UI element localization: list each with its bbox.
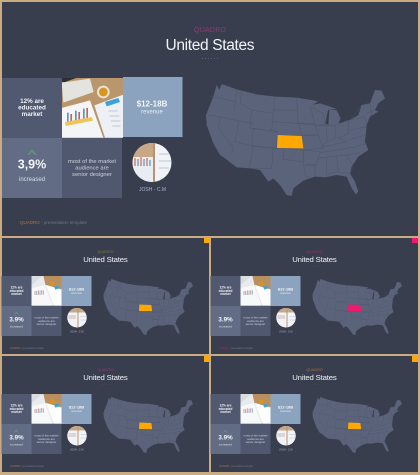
slide: bottom left: QUADRO - presentation template — [10, 465, 45, 468]
corner tabs — [204, 238, 418, 362]
panel: senior designer text: senior designer — [72, 172, 112, 178]
US map — [206, 84, 385, 196]
slide: bottom right — [210, 368, 402, 468]
slide: top right: increased — [219, 324, 232, 328]
panel: revenue — [123, 77, 182, 137]
slide: top right — [210, 250, 402, 350]
slide: bottom left: JOSH - C.M — [70, 448, 84, 452]
slide: top right: most of the market — [244, 316, 268, 320]
slide: bottom left: senior designer — [37, 440, 56, 444]
slide: bottom right: audience are — [247, 437, 264, 441]
slide: top right: QUADRO — [306, 250, 323, 254]
slide: top left — [2, 250, 193, 350]
panel: educated market: market — [22, 111, 43, 118]
slide: bottom right: most of the market — [244, 434, 268, 438]
slide: top left: senior designer — [37, 322, 56, 326]
slide: bottom right: QUADRO - presentation template — [220, 465, 254, 468]
panel: senior designer text: audience are — [75, 166, 109, 172]
slide: top right: 12% are — [220, 286, 232, 290]
title: United States — [166, 37, 255, 54]
slide: bottom left: United States — [83, 373, 128, 382]
slide: top left: revenue — [71, 291, 82, 295]
slide: bottom left: audience are — [38, 437, 55, 441]
slide: bottom right: $12-18B — [278, 404, 293, 409]
slide: top right: market — [220, 292, 231, 296]
slide: top right: 3.9% — [218, 316, 233, 323]
slide: top right: United States — [292, 255, 337, 264]
slide: bottom right: ...... — [310, 382, 319, 386]
panel: educated market: educated — [18, 104, 46, 112]
slide: bottom right: QUADRO — [306, 368, 323, 372]
slide: top right: audience are — [247, 319, 264, 323]
slide: top left: educated — [10, 289, 23, 293]
slide: bottom left: market — [11, 410, 22, 414]
slide: top right: ...... — [310, 264, 319, 268]
slide: bottom right: United States — [292, 373, 337, 382]
slide: top left: 12% are — [11, 286, 23, 290]
slide: top right: educated — [219, 289, 232, 293]
slide: bottom left: educated — [10, 407, 23, 411]
slide: top right: QUADRO - presentation template — [220, 347, 254, 350]
slide: top left: audience are — [38, 319, 55, 323]
slide: bottom left: QUADRO — [98, 368, 114, 372]
slide: bottom left: increased — [10, 442, 23, 446]
eyebrow: QUADRO: QUADRO — [194, 27, 227, 34]
main slide — [2, 27, 385, 225]
slide: bottom left: 12% are — [11, 404, 23, 408]
highlighted state: Kansas — [277, 135, 303, 148]
photo: desk with charts — [60, 75, 125, 139]
slide: bottom right: JOSH - C.M — [279, 448, 292, 452]
slide: top right: JOSH - C.M — [279, 330, 292, 334]
slide: bottom right: market — [220, 410, 231, 414]
portrait circle — [130, 141, 174, 185]
slide: top right: senior designer — [246, 322, 265, 326]
slide: bottom right: senior designer — [246, 440, 265, 444]
panel: revenue: revenue — [141, 110, 164, 116]
footer text: QUADRO - presentation template — [20, 220, 88, 225]
slide: top left: QUADRO — [98, 250, 114, 254]
slide: top left: ...... — [101, 264, 110, 268]
slide: top right: revenue — [280, 291, 291, 295]
panel: increased stat: increased — [19, 177, 45, 183]
caption: JOSH - C.M: JOSH - C.M — [139, 187, 166, 193]
slide: bottom left: revenue — [71, 409, 82, 413]
slide: bottom right: increased — [219, 442, 232, 446]
slide: bottom left: ...... — [101, 382, 110, 386]
slide: bottom left: $12-18B — [69, 404, 84, 409]
slide: top left: market — [11, 292, 22, 296]
panel: educated market: 12% are — [20, 98, 44, 105]
slide: top left: most of the market — [35, 316, 59, 320]
slide: bottom left: 3.9% — [9, 434, 24, 441]
slide: top left: $12-18B — [69, 286, 84, 291]
slide: top left: United States — [83, 255, 128, 264]
slide: top left: JOSH - C.M — [70, 330, 84, 334]
slide: bottom right: revenue — [280, 409, 291, 413]
slide: bottom right: educated — [219, 407, 232, 411]
title dots: ...... — [202, 55, 218, 61]
panel: increased stat: 3,9% — [18, 158, 46, 172]
slide: top left: 3.9% — [9, 316, 24, 323]
slide: bottom left — [2, 368, 193, 468]
slide: bottom right: 3.9% — [218, 434, 233, 441]
slide: bottom right: 12% are — [220, 404, 232, 408]
panel: educated market — [2, 78, 62, 138]
slide: top right: $12-18B — [278, 286, 293, 291]
panel: increased stat — [2, 138, 62, 198]
slide: top left: QUADRO - presentation template — [10, 347, 45, 350]
panel: senior designer text: most of the market — [68, 159, 116, 165]
panel: revenue: $12-18B — [137, 100, 168, 108]
slide: bottom left: most of the market — [35, 434, 59, 438]
panel: senior designer text — [62, 138, 122, 198]
slide: top left: increased — [10, 324, 23, 328]
